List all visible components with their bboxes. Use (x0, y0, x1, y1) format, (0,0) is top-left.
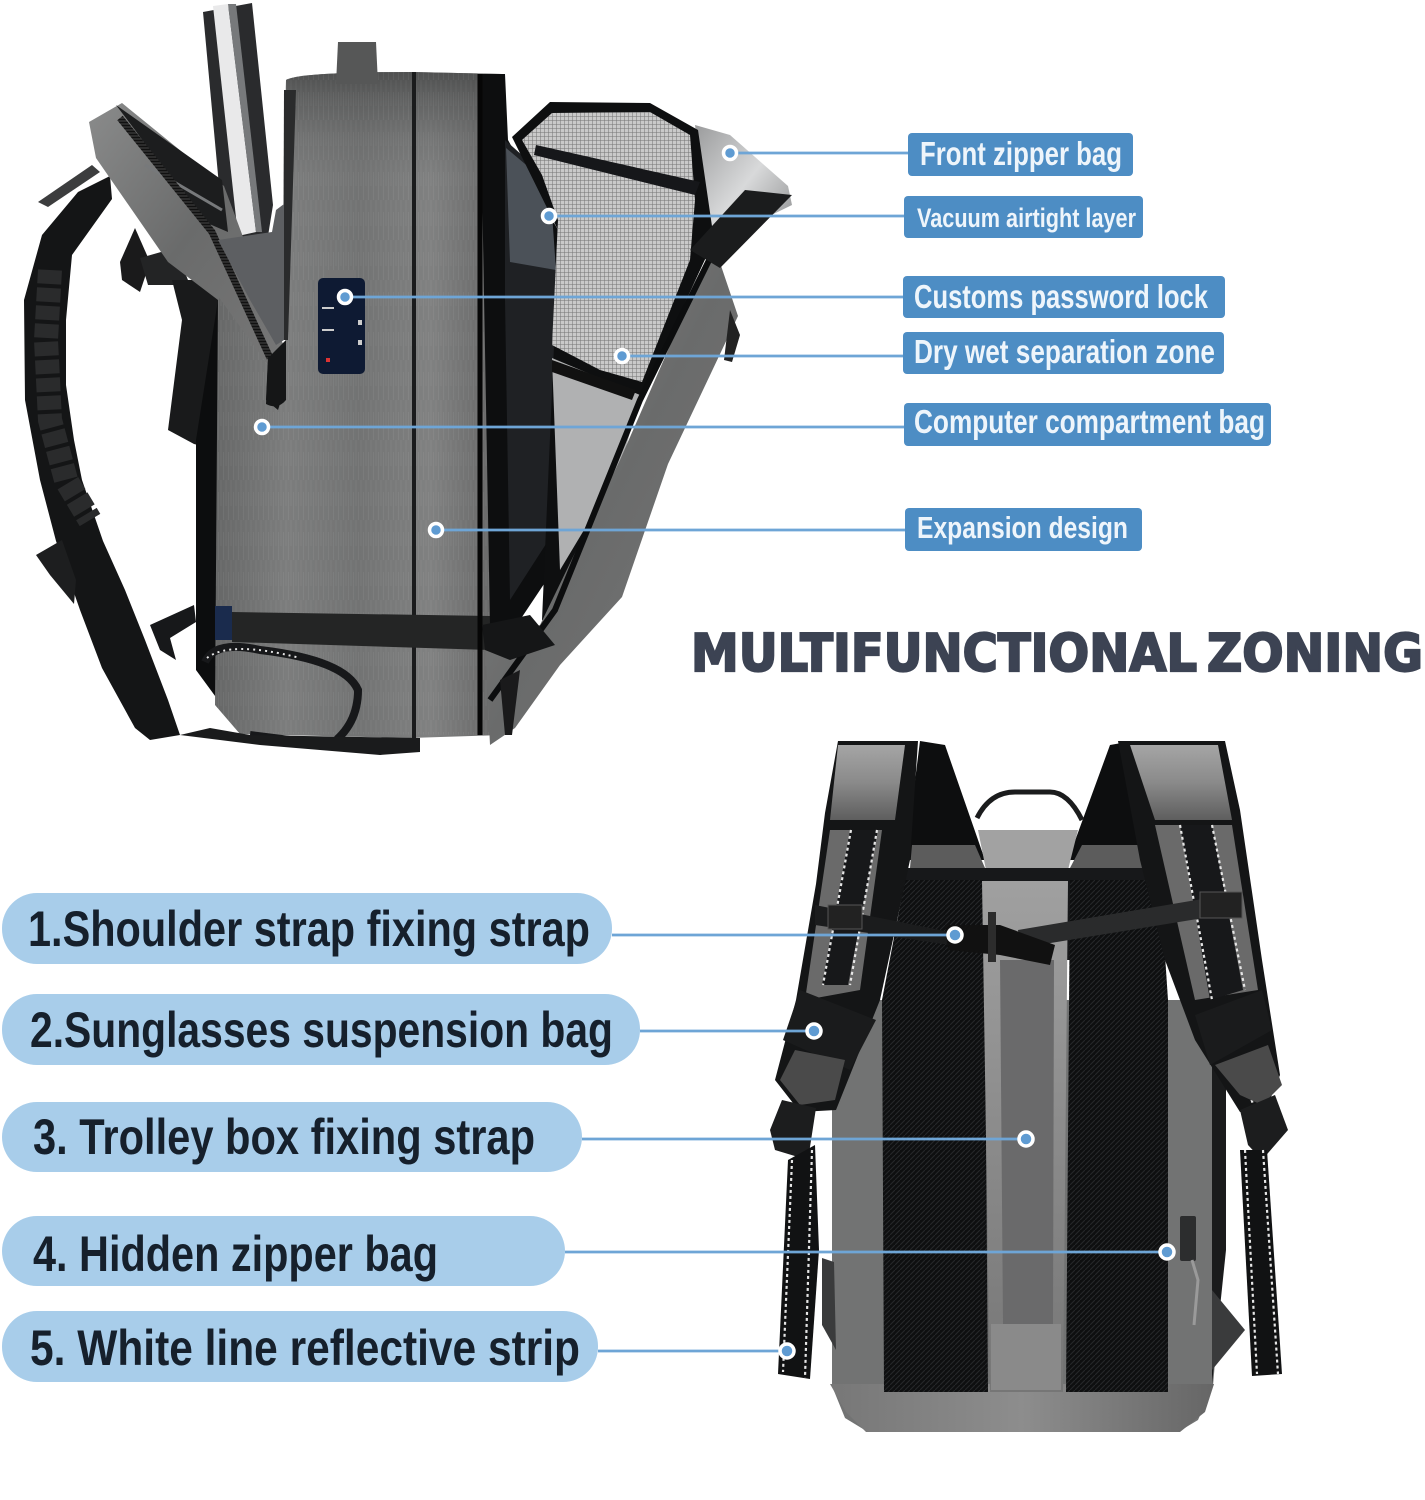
title: MULTIFUNCTIONAL (691, 623, 1197, 683)
pill: trolley box fixing strap: 3. Trolley box fixing strap (33, 1109, 535, 1165)
label: computer compartment bag: Computer compartment bag (914, 403, 1265, 440)
callout lines and dots: lower (565, 928, 1174, 1358)
zipper pull (266, 360, 286, 406)
sternum strap and buckle (815, 892, 1242, 965)
backpack back view with straps (770, 741, 1288, 1432)
backpack side view with open compartments (24, 3, 792, 755)
label: expansion design (905, 508, 1142, 551)
front pocket flap (89, 103, 286, 368)
label: expansion design: Expansion design (917, 510, 1128, 545)
hanging reflective straps (778, 1145, 1282, 1379)
pill: hidden zipper bag: 4. Hidden zipper bag (33, 1226, 438, 1282)
title: ZONING (1207, 623, 1423, 683)
outer flap panel (482, 190, 792, 745)
centre strap (982, 881, 1068, 1392)
label: vacuum airtight layer (904, 196, 1143, 238)
side fittings (822, 1258, 836, 1350)
label: dry wet separation zone: Dry wet separation zone (914, 333, 1215, 370)
main body (215, 42, 502, 738)
callout lines and dots: upper (256, 146, 908, 536)
label: customs password lock: Customs password lock (914, 278, 1208, 315)
left shoulder strap (770, 741, 918, 1160)
label: computer compartment bag (904, 403, 1271, 446)
combination lock (318, 270, 365, 374)
pill: white line reflective strip (2, 1311, 598, 1382)
label: front zipper bag: Front zipper bag (920, 135, 1122, 172)
black wings behind straps (905, 741, 1150, 860)
laptop (203, 3, 273, 240)
label: front zipper bag (908, 133, 1133, 176)
open front interior (480, 74, 560, 735)
webbing behind body (168, 280, 218, 450)
pill: shoulder strap fixing strap (2, 893, 612, 964)
label: vacuum airtight layer: Vacuum airtight layer (917, 203, 1136, 233)
mesh back panels (882, 880, 1168, 1392)
pill: hidden zipper bag (2, 1216, 565, 1286)
pill: sunglasses suspension bag: 2.Sunglasses suspension bag (30, 1002, 613, 1058)
pill: sunglasses suspension bag (2, 994, 640, 1065)
pill: shoulder strap fixing strap: 1.Shoulder strap fixing strap (28, 901, 590, 957)
body shell (832, 1000, 1226, 1432)
opened flap with mesh lining (512, 102, 792, 620)
hidden zipper (1180, 1216, 1245, 1370)
top handle (977, 792, 1082, 820)
top panel (978, 830, 1078, 870)
title (691, 623, 1423, 683)
right shoulder strap (1118, 741, 1288, 1160)
pill: white line reflective strip: 5. White line reflective strip (30, 1320, 580, 1376)
shoulder strap (24, 165, 196, 740)
compression strap (180, 606, 490, 755)
